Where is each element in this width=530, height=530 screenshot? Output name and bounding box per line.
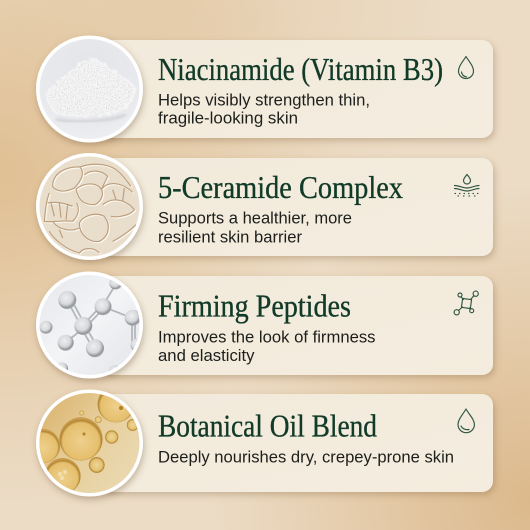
- panel: botanical oil: [26, 386, 493, 496]
- image: ceramide texture: [36, 153, 143, 260]
- title: niacinamide: Niacinamide (Vitamin B3): [158, 52, 443, 87]
- description: ceramide: [158, 210, 352, 246]
- icon: molecule: [454, 291, 478, 315]
- icon: water drop: [458, 56, 474, 78]
- description: peptides: and elasticity: [158, 347, 255, 365]
- image: molecules: [36, 272, 144, 378]
- description: peptides: Improves the look of firmness: [158, 329, 376, 347]
- description: niacinamide: fragile-looking skin: [158, 110, 298, 128]
- description: ceramide: resilient skin barrier: [158, 228, 303, 246]
- title: peptides: Firming Peptides: [158, 289, 351, 324]
- description: niacinamide: Helps visibly strengthen thin,: [158, 92, 370, 110]
- card: ceramide: [100, 158, 493, 256]
- panel: ceramide: [36, 153, 493, 260]
- description: peptides: [158, 329, 376, 365]
- title: ceramide: 5-Ceramide Complex: [158, 170, 403, 205]
- title: botanical oil: Botanical Oil Blend: [158, 409, 377, 444]
- description: ceramide: Supports a healthier, more: [158, 210, 352, 228]
- card: peptides: [100, 276, 493, 375]
- description: botanical oil: Deeply nourishes dry, crepey-prone skin: [158, 448, 454, 466]
- panel: peptides: [36, 272, 493, 378]
- image: white powder: [36, 36, 143, 142]
- description: niacinamide: [158, 92, 370, 128]
- card: niacinamide: [100, 40, 493, 138]
- icon: oil drop: [458, 409, 474, 433]
- panel: niacinamide: [36, 36, 493, 142]
- icon: skin barrier: [454, 174, 479, 196]
- image: oil bubbles: [26, 386, 143, 496]
- card: botanical oil: [100, 394, 493, 492]
